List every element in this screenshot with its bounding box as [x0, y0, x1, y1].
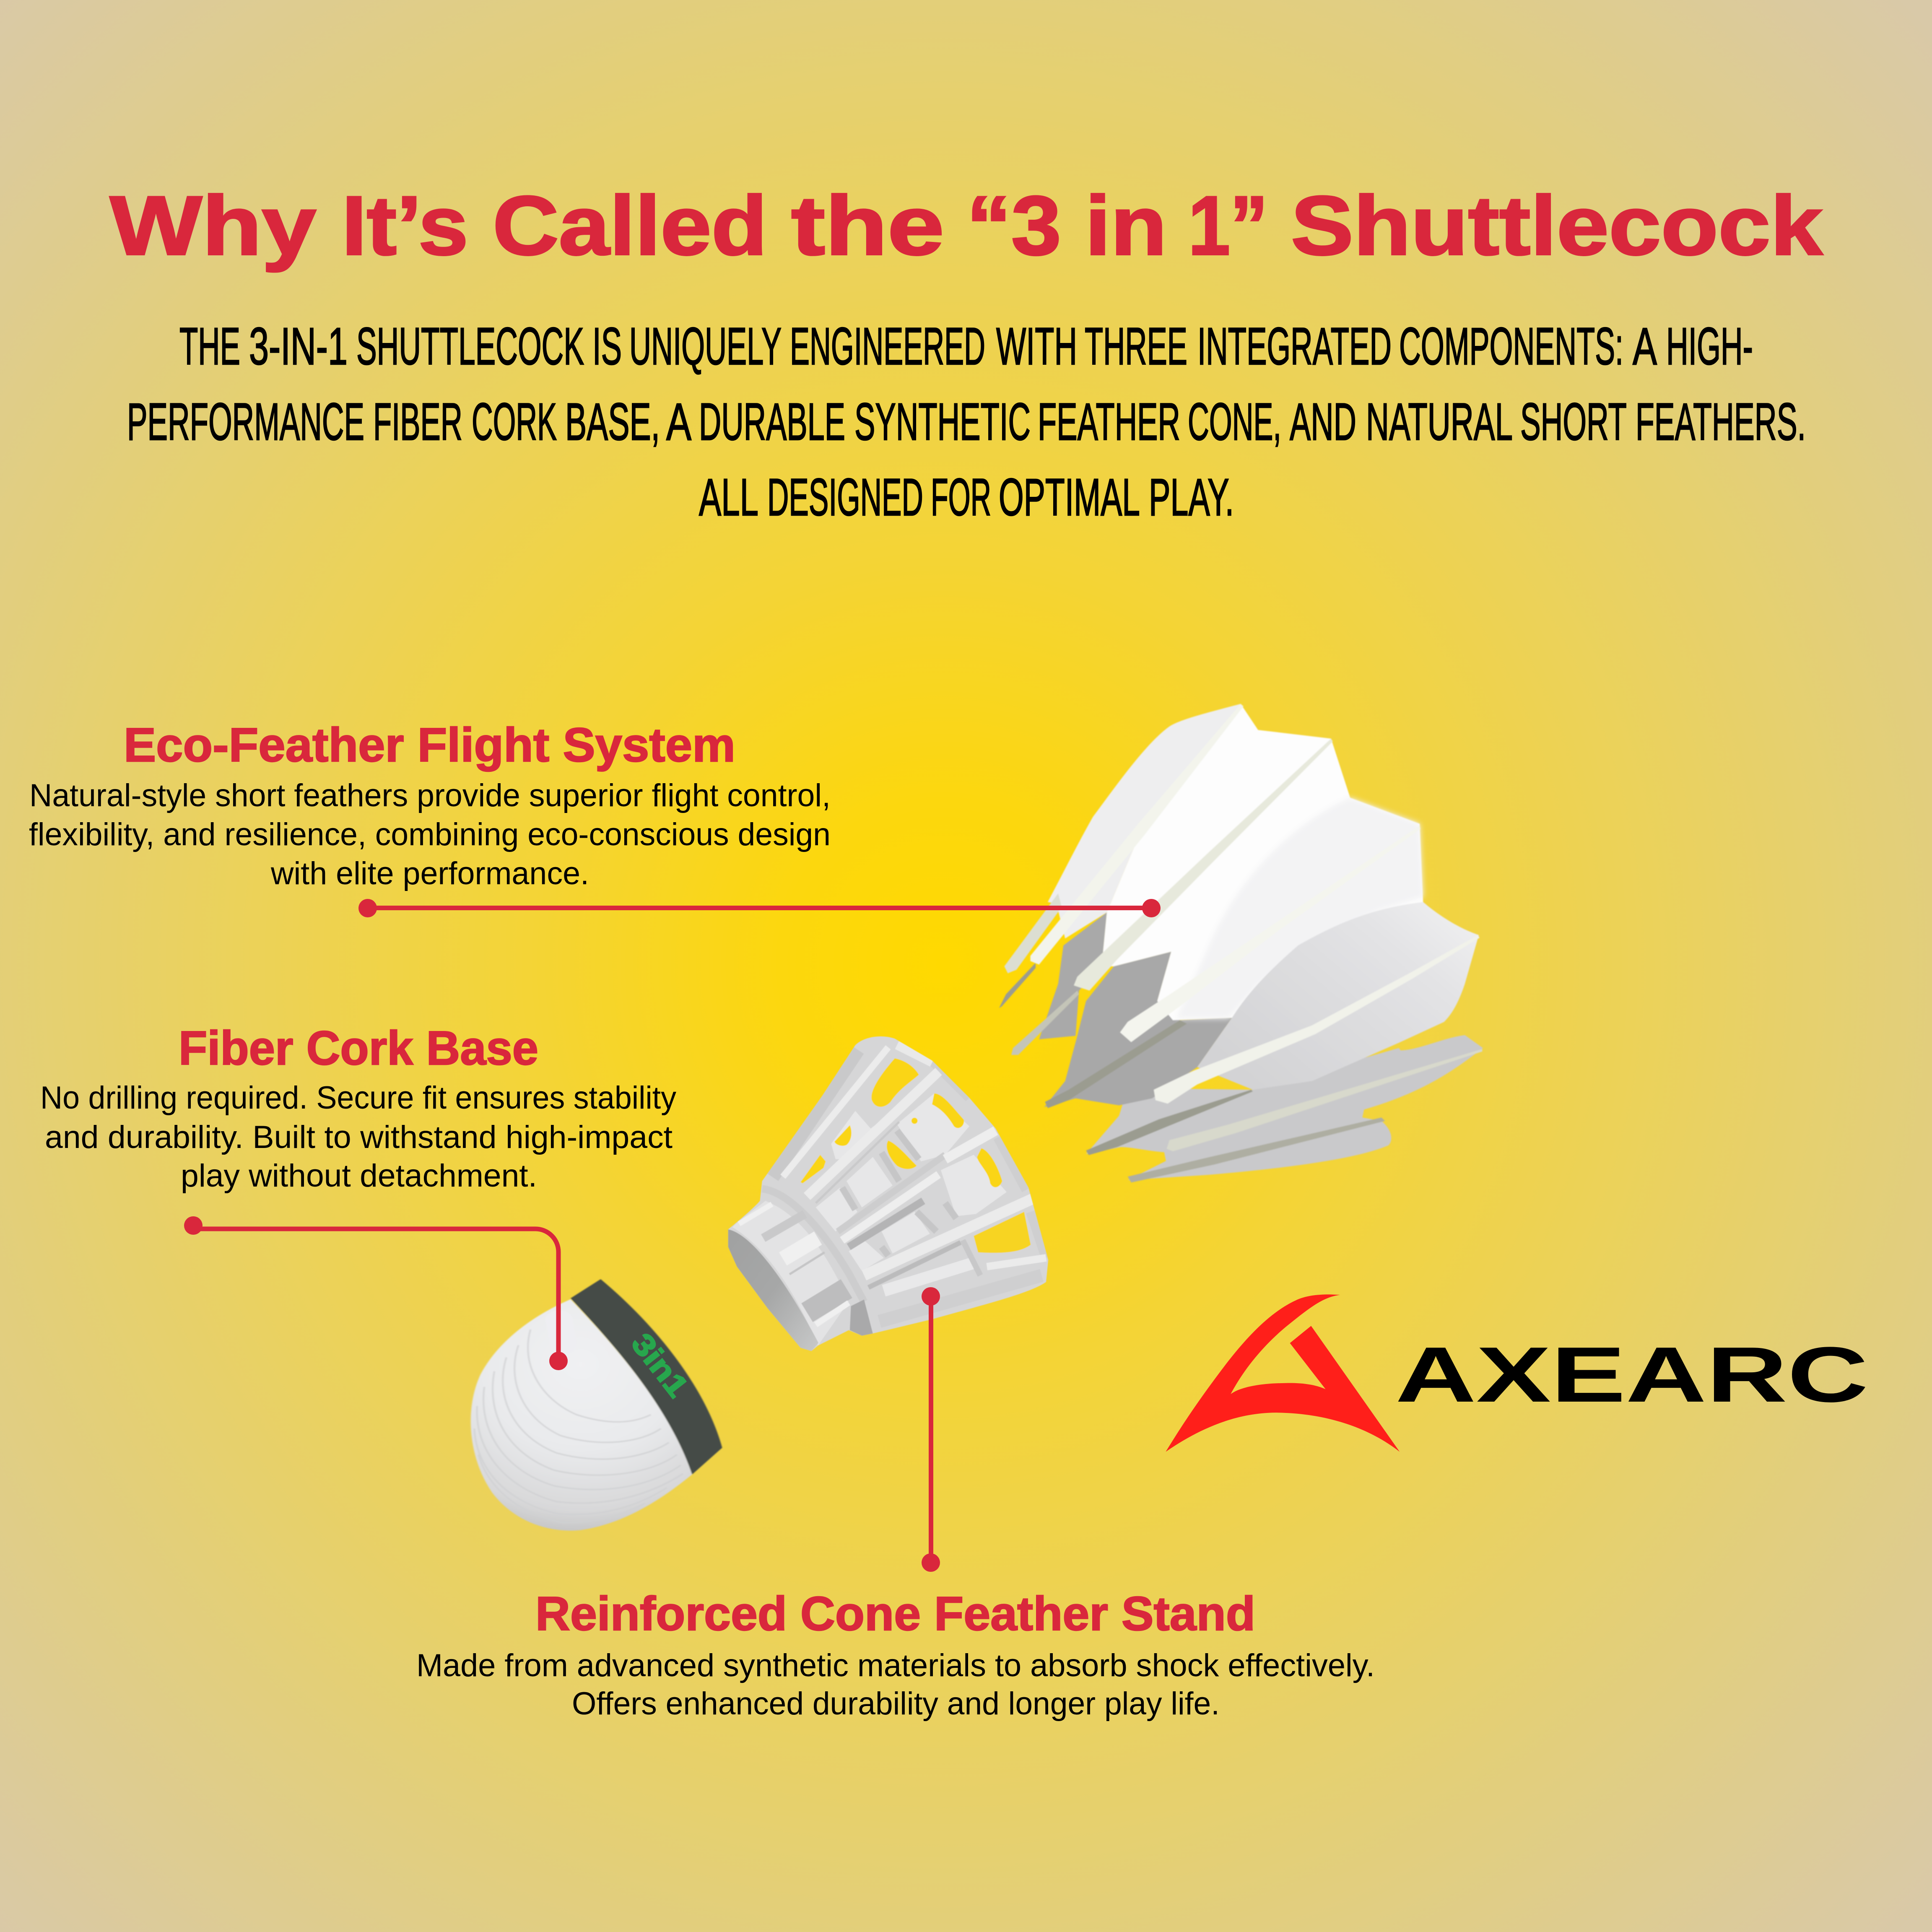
subtitle text block: CORK	[472, 393, 557, 451]
subtitle text block: A	[1633, 317, 1657, 376]
text block: reinforced cone description: Made from advanced synthetic materials to absorb shock effectively.	[416, 1648, 1375, 1683]
title: It’s	[342, 179, 468, 273]
subtitle text block: PERFORMANCE	[127, 393, 364, 451]
subtitle text block: THREE	[1085, 317, 1187, 376]
white feather vanes	[1101, 704, 1423, 1020]
cone neck	[732, 1201, 849, 1345]
title: the	[791, 179, 944, 273]
icon: fiber cork base	[471, 1279, 722, 1531]
subtitle text block: OPTIMAL	[999, 468, 1140, 527]
title: Shuttlecock	[1291, 179, 1823, 273]
title: Called	[493, 179, 767, 273]
logo: AXEARC	[1166, 1294, 1868, 1452]
text block: eco-feather description: Natural-style short feathers provide superior flight control,	[29, 778, 831, 813]
text block: reinforced cone description	[416, 1648, 1375, 1722]
cone neck opening	[728, 1229, 818, 1351]
text block: fiber cork description: No drilling required. Secure fit ensures stability	[40, 1080, 676, 1116]
cone body	[728, 1036, 1048, 1351]
subtitle text block: 3-IN-1	[249, 317, 348, 376]
subtitle text block: FOR	[931, 468, 991, 527]
gray right feather	[1197, 902, 1479, 1090]
title	[110, 179, 1823, 273]
dark gray panels	[1039, 912, 1107, 1039]
cone structure clipped to outline	[728, 1045, 1046, 1351]
heading: reinforced cone: Reinforced Cone Feather Stand	[535, 1587, 1255, 1641]
subtitle text block: SHUTTLECOCK	[356, 317, 584, 376]
text block: fiber cork description: play without detachment.	[181, 1158, 537, 1194]
subtitle text block: BASE,	[565, 393, 660, 451]
text block: reinforced cone description: Offers enhanced durability and longer play life.	[572, 1686, 1220, 1722]
subtitle text block: FEATHER	[1038, 393, 1180, 451]
subtitle text block: INTEGRATED	[1197, 317, 1392, 376]
subtitle text block: ENGINEERED	[790, 317, 985, 376]
cork ripple lines	[474, 1330, 683, 1523]
panel: fiber cork base	[40, 1022, 676, 1194]
logo wordmark: AXEARC	[1395, 1331, 1868, 1418]
collar base	[850, 1299, 873, 1336]
title: in	[1085, 179, 1167, 273]
subtitle text block: FEATHERS.	[1636, 393, 1806, 451]
subtitle text block: PLAY.	[1149, 468, 1234, 527]
heading: eco-feather: Eco-Feather Flight System	[124, 719, 735, 772]
subtitle text block: SHORT	[1520, 393, 1627, 451]
panel: eco-feather flight system	[29, 719, 831, 891]
title: “3	[966, 179, 1061, 273]
subtitle text block: AND	[1290, 393, 1356, 451]
icon: synthetic feather skirt	[999, 704, 1483, 1182]
arrow: fiber cork leader	[184, 1216, 568, 1370]
subtitle text block: CONE,	[1188, 393, 1281, 451]
icon: logo mark	[1166, 1294, 1400, 1452]
arrow: eco-feather leader	[358, 899, 1161, 917]
subtitle text block: NATURAL	[1366, 393, 1513, 451]
panel: reinforced cone feather stand	[416, 1587, 1375, 1722]
cork dome	[471, 1299, 692, 1531]
subtitle text block: IS	[592, 317, 622, 376]
text block: fiber cork description	[40, 1080, 676, 1194]
cork dark band	[571, 1279, 722, 1475]
text block: eco-feather description: flexibility, and resilience, combining eco-conscious design	[29, 817, 831, 852]
title: Why	[110, 179, 316, 273]
subtitle text block: WITH	[996, 317, 1077, 376]
cork band label: 3in1	[625, 1327, 695, 1403]
icon: reinforced cone feather stand	[728, 1036, 1048, 1351]
lower gray feathers	[1086, 1035, 1483, 1180]
subtitle text block: DURABLE	[699, 393, 845, 451]
subtitle text block: FIBER	[373, 393, 462, 451]
heading: fiber cork base: Fiber Cork Base	[179, 1022, 538, 1075]
cork pale highlight	[545, 1311, 576, 1354]
subtitle text block: SYNTHETIC	[854, 393, 1031, 451]
feather quills	[1004, 704, 1480, 1104]
cone windows	[800, 1058, 1031, 1253]
subtitle text block: THE	[179, 317, 240, 376]
arrow: reinforced cone leader	[922, 1287, 940, 1572]
text block: eco-feather description	[29, 778, 831, 891]
subtitle text block: A	[666, 393, 691, 451]
subtitle text block	[127, 317, 1806, 527]
subtitle text block: UNIQUELY	[629, 317, 782, 376]
text block: fiber cork description: and durability. Built to withstand high-impact	[45, 1119, 673, 1155]
subtitle text block: COMPONENTS:	[1399, 317, 1623, 376]
title: 1”	[1188, 179, 1268, 273]
cone lattice panels	[816, 1093, 1007, 1271]
pale rear feather	[1048, 704, 1241, 938]
subtitle text block: HIGH-	[1666, 317, 1753, 376]
subtitle text block: ALL	[699, 468, 758, 527]
thin rear quills	[999, 963, 1385, 1182]
subtitle text block: DESIGNED	[767, 468, 923, 527]
text block: eco-feather description: with elite performance.	[270, 856, 589, 891]
cone ribs	[762, 1045, 1046, 1322]
